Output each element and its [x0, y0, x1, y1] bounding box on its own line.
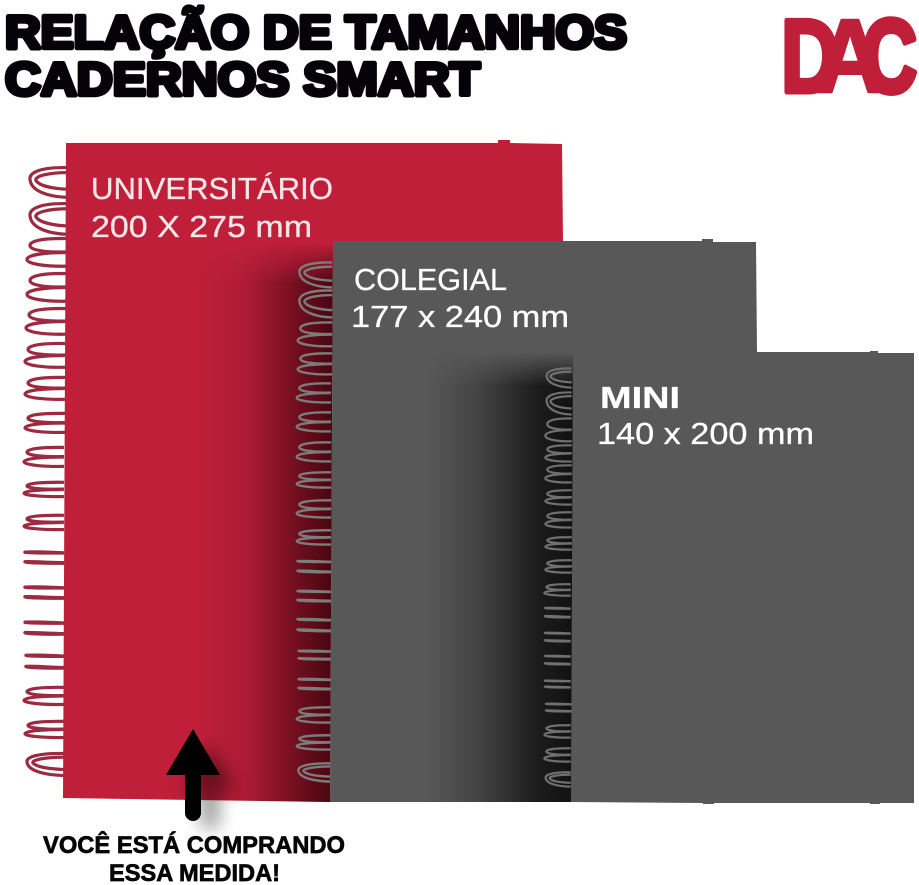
spiral: colegial [297, 262, 332, 782]
notebook: colegial [297, 239, 757, 802]
notebook: universitário [24, 140, 563, 802]
label: mini [597, 380, 814, 451]
title [5, 6, 627, 105]
spiral: universitário [24, 168, 68, 776]
spiral: mini [544, 368, 572, 787]
callout [43, 831, 345, 885]
label: colegial [351, 262, 569, 334]
cover shadow: colegial [425, 352, 573, 802]
cover: mini [571, 351, 914, 804]
label: colegial: 177 x 240 mm [351, 299, 569, 334]
logo: DAC [781, 0, 917, 115]
cover: universitário [63, 140, 563, 802]
label: universitário: UNIVERSITÁRIO [91, 171, 333, 206]
label: mini: 140 x 200 mm [597, 416, 814, 451]
notebook: mini [544, 351, 914, 804]
label: mini: MINI [600, 380, 680, 415]
cover shadow: universitário [195, 242, 333, 802]
label: universitário: 200 X 275 mm [91, 209, 312, 244]
label: universitário [91, 171, 333, 244]
arrow [166, 729, 236, 828]
title: CADERNOS SMART [5, 53, 480, 105]
callout: VOCÊ ESTÁ COMPRANDO [43, 831, 345, 859]
cover: colegial [330, 239, 757, 802]
logo: DAC: A [815, 0, 885, 115]
label: colegial: COLEGIAL [354, 262, 507, 297]
logo: DAC: D [781, 0, 839, 115]
title: RELAÇÃO DE TAMANHOS [5, 6, 627, 58]
